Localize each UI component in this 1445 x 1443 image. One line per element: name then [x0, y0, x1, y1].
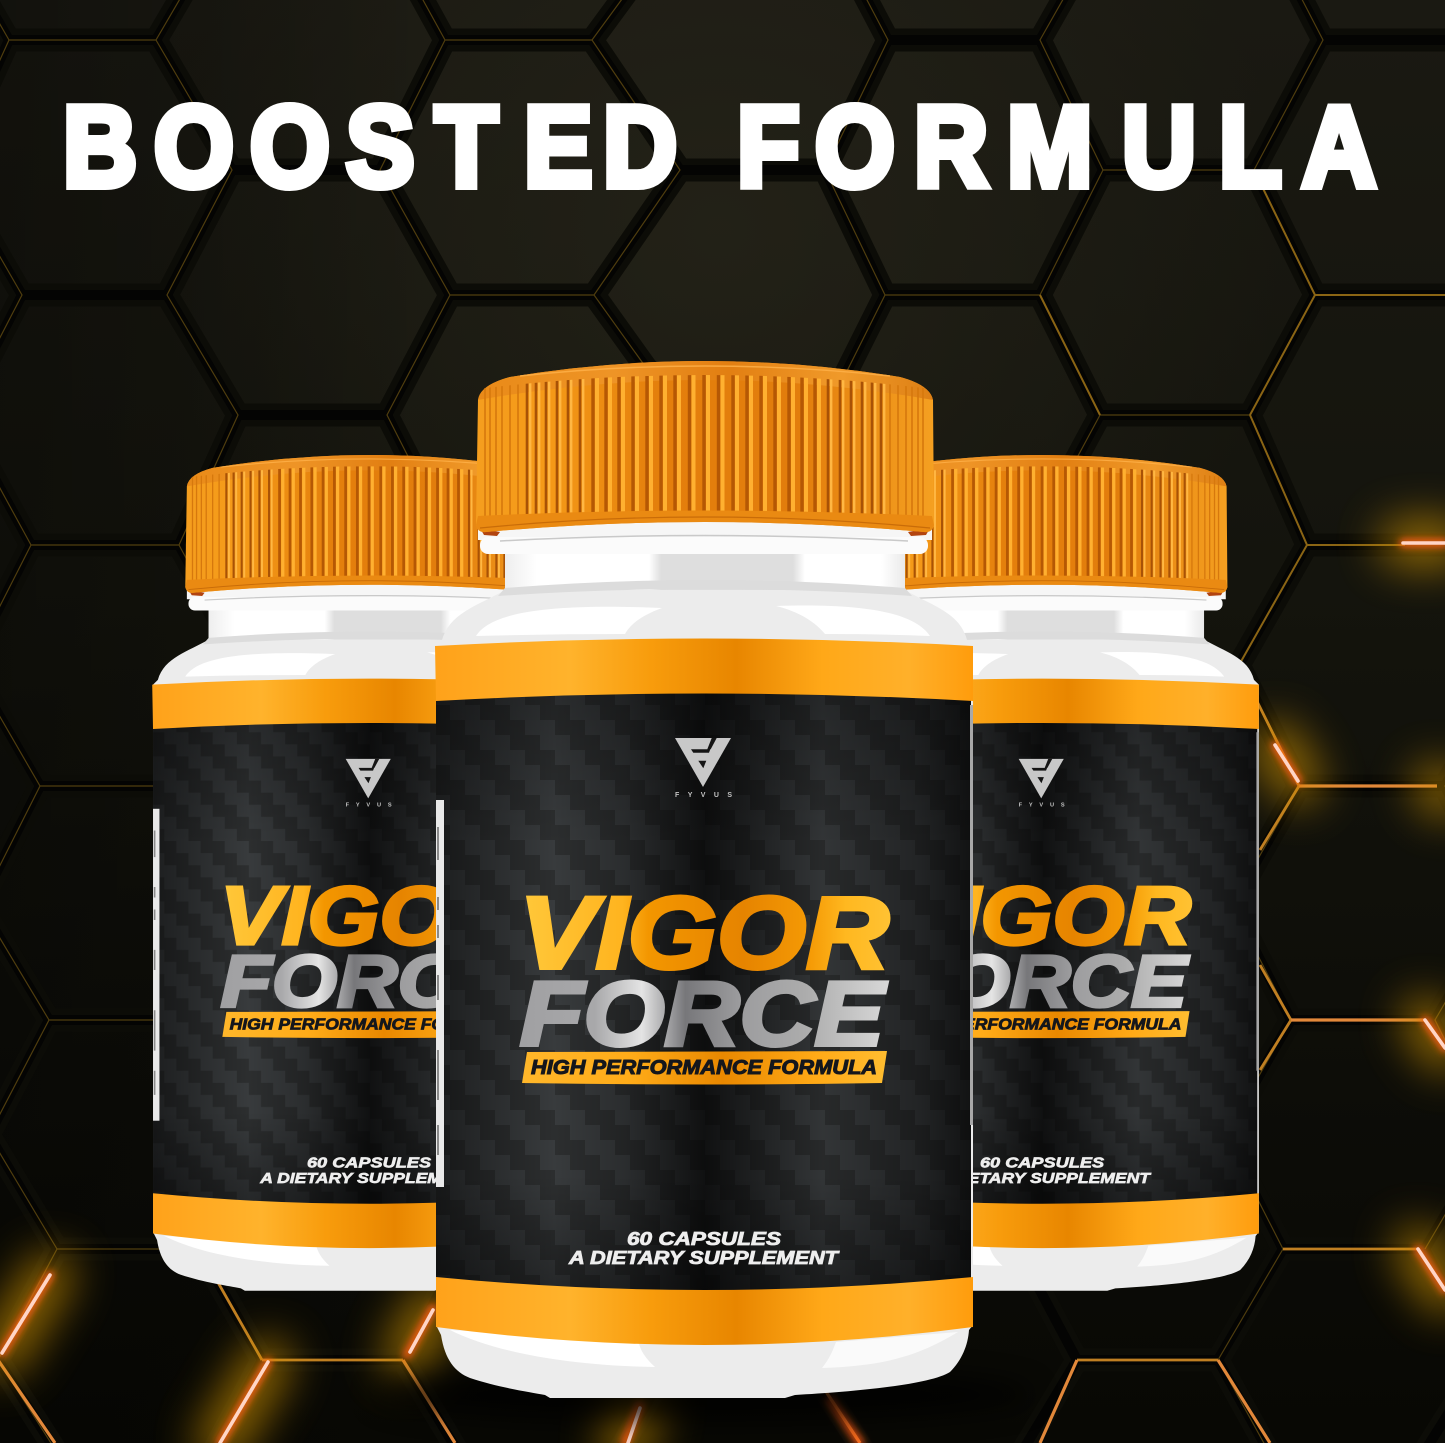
centre bottle	[435, 360, 973, 1398]
left bottle product name: FYVUS	[346, 802, 392, 808]
left bottle product name: FORCE	[221, 940, 516, 1022]
centre bottle product name: A DIETARY SUPPLEMENT	[568, 1248, 840, 1268]
heading: Boosted Formula	[63, 83, 1376, 210]
heading: Boosted Formula: FORMULA	[737, 83, 1376, 210]
right bottle product name: VIGOR	[893, 871, 1191, 962]
right bottle product name: FYVUS	[1019, 802, 1065, 808]
right bottle product name: 60 CAPSULES	[980, 1155, 1104, 1171]
left bottle product name: A DIETARY SUPPLEMENT	[259, 1171, 478, 1187]
left bottle product name: 60 CAPSULES	[307, 1155, 431, 1171]
centre bottle product name: FORCE	[520, 964, 887, 1065]
left bottle product name: VIGOR	[220, 871, 518, 962]
left bottle	[152, 454, 586, 1291]
shadow under the bottles	[374, 1369, 1034, 1421]
left bottle product name	[220, 802, 518, 1187]
right bottle product name: HIGH PERFORMANCE FORMULA	[903, 1016, 1181, 1034]
right bottle	[825, 454, 1259, 1291]
centre bottle product name: HIGH PERFORMANCE FORMULA	[531, 1057, 877, 1079]
right bottle product name: A DIETARY SUPPLEMENT	[932, 1171, 1151, 1187]
left bottle product name: HIGH PERFORMANCE FORMULA	[230, 1016, 508, 1034]
right bottle product name: FORCE	[894, 940, 1189, 1022]
centre bottle product name: FYVUS	[675, 792, 732, 799]
glowing hexagon edges	[2, 543, 1445, 1443]
centre bottle product name: VIGOR	[519, 876, 889, 990]
centre bottle product name	[519, 792, 889, 1268]
right bottle product name	[893, 802, 1191, 1187]
heading: Boosted Formula: BOOSTED	[63, 83, 677, 210]
centre bottle product name: 60 CAPSULES	[627, 1229, 781, 1249]
